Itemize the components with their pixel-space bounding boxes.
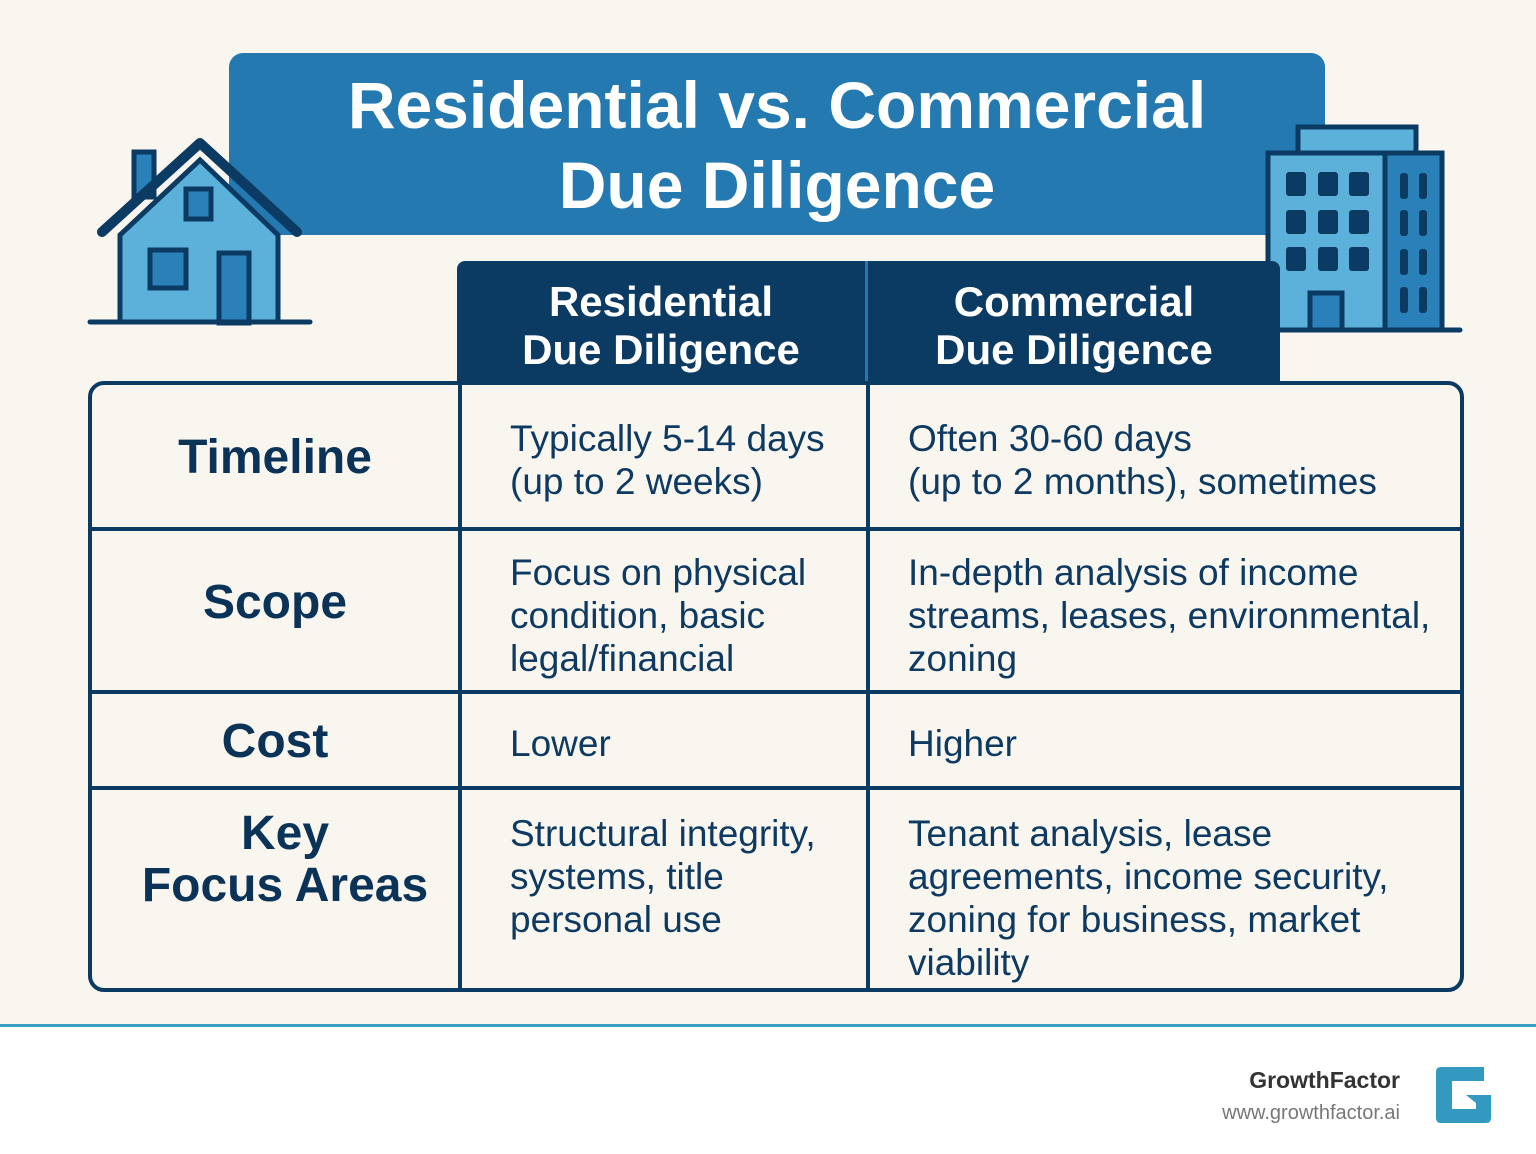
cell: residential focus (510, 813, 816, 940)
cell: commercial timeline: Often 30-60 days (908, 418, 1192, 459)
cell: commercial timeline: (up to 2 months), sometimes (908, 461, 1377, 502)
row label: key focus areas (142, 807, 428, 912)
icon: house (88, 138, 312, 326)
cell: residential timeline: (up to 2 weeks) (510, 461, 763, 502)
cell: residential scope: condition, basic (510, 595, 765, 636)
comparison table (88, 381, 1464, 992)
title banner (229, 53, 1325, 235)
column headers (457, 261, 1280, 385)
cell: commercial scope (908, 552, 1430, 679)
cell: residential focus: Structural integrity, (510, 813, 816, 854)
cell: residential cost: Lower (510, 723, 611, 764)
header: residential: Residential (549, 278, 773, 325)
cell: commercial focus: zoning for business, market (908, 899, 1360, 940)
header: residential: Due Diligence (522, 326, 800, 373)
header: residential (522, 278, 800, 373)
cell: residential timeline: Typically 5-14 days (510, 418, 825, 459)
cell: commercial focus: Tenant analysis, lease (908, 813, 1272, 854)
cell: commercial scope: In-depth analysis of income (908, 552, 1358, 593)
title banner: Residential vs. Commercial (348, 68, 1206, 142)
icon: office building (1266, 124, 1462, 332)
title banner: Due Diligence (559, 148, 995, 222)
row label: key focus areas: Focus Areas (142, 859, 428, 912)
cell: residential focus: personal use (510, 899, 722, 940)
cell: residential timeline (510, 418, 825, 502)
brand text (1222, 1067, 1400, 1124)
row label: timeline: Timeline (178, 431, 372, 484)
cell: commercial timeline (908, 418, 1377, 502)
cell: residential scope: legal/financial (510, 638, 734, 679)
cell: commercial scope: zoning (908, 638, 1017, 679)
header: commercial (865, 261, 1280, 385)
row label: cost: Cost (222, 715, 328, 768)
header: commercial: Due Diligence (935, 326, 1213, 373)
cell: commercial focus: viability (908, 942, 1029, 983)
cell: residential scope (510, 552, 806, 679)
cell: residential focus: systems, title (510, 856, 724, 897)
row label: key focus areas: Key (241, 807, 329, 860)
cell: commercial scope: streams, leases, environmental, (908, 595, 1430, 636)
cell: commercial focus (908, 813, 1389, 983)
logo: G (1436, 1067, 1491, 1123)
cell: commercial focus: agreements, income security, (908, 856, 1389, 897)
brand text: www.growthfactor.ai (1222, 1102, 1400, 1124)
row label: scope: Scope (203, 576, 347, 628)
footer (0, 1024, 1536, 1154)
cell: commercial cost: Higher (908, 723, 1017, 764)
cell: residential scope: Focus on physical (510, 552, 806, 593)
header: commercial: Commercial (954, 278, 1194, 325)
brand text: GrowthFactor (1249, 1067, 1400, 1093)
